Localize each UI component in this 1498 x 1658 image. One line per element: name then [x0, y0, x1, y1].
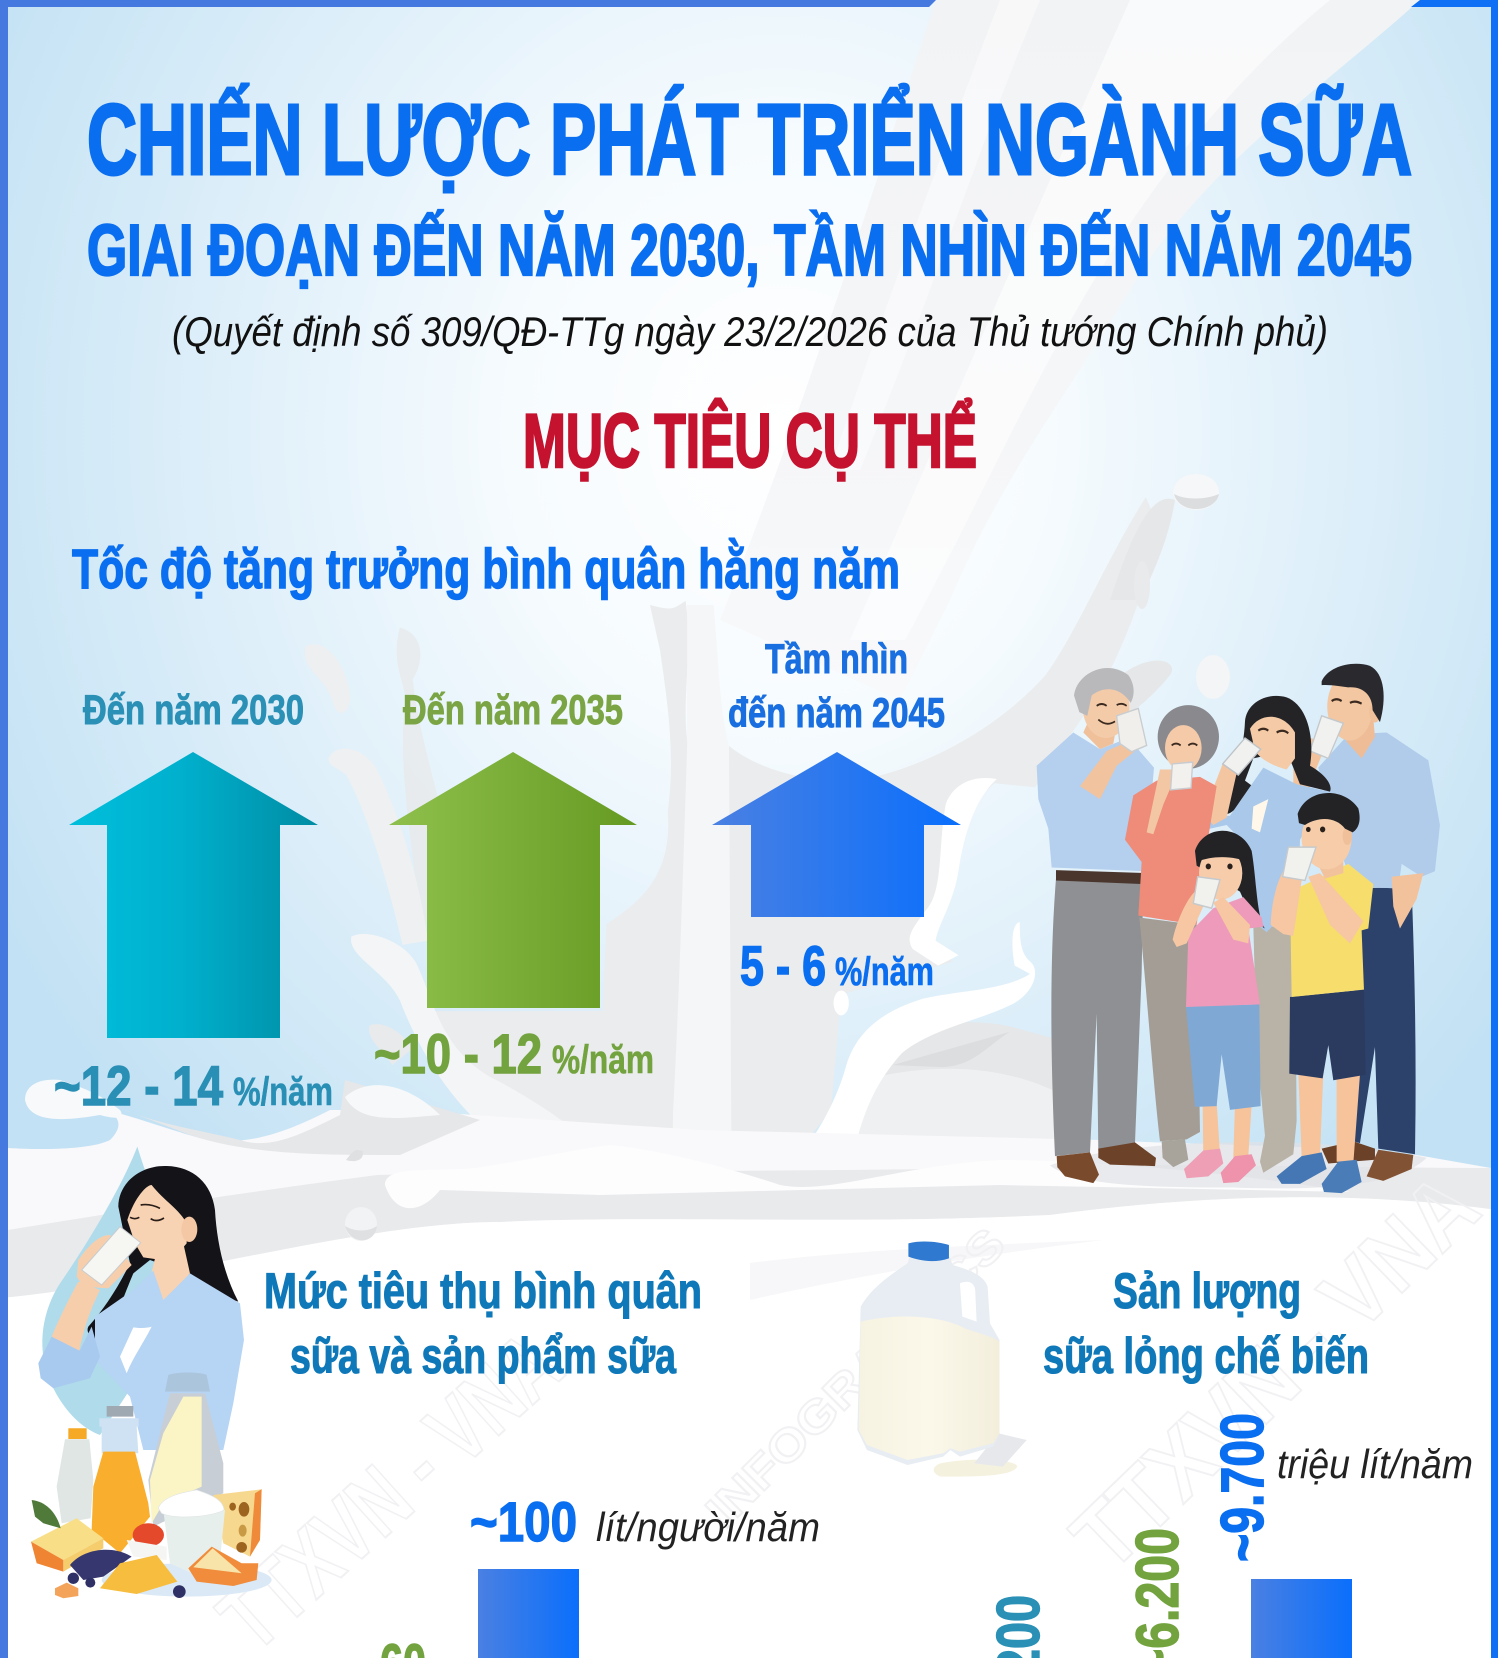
heading: liquid milk output: sữa lỏng chế biến	[1043, 1328, 1369, 1384]
heading: liquid milk output: Sản lượng	[1113, 1263, 1301, 1319]
watermarks	[200, 1155, 1498, 1658]
milk stream from top	[720, 0, 1420, 700]
title	[87, 84, 1412, 291]
subtitle: (Quyết định số 309/QĐ-TTg ngày 23/2/2026 của Thủ tướng Chính phủ)	[172, 308, 1328, 355]
growth item 2045: %/năm	[835, 950, 934, 994]
heading: consumption: Mức tiêu thụ bình quân	[264, 1263, 702, 1319]
output bar chart	[985, 1413, 1352, 1658]
grandfather	[1037, 668, 1156, 1183]
growth item 2030: Đến năm 2030	[83, 686, 304, 733]
boy	[1271, 793, 1373, 1193]
illustration: milk jug	[857, 1242, 1027, 1477]
growth item 2030: %/năm	[233, 1070, 333, 1114]
heading: growth rate: Tốc độ tăng trưởng bình quân hằng năm	[72, 537, 900, 600]
section heading: specific targets: MỤC TIÊU CỤ THỂ	[523, 398, 977, 484]
heading: consumption	[264, 1263, 702, 1384]
growth item 2045: đến năm 2045	[728, 689, 945, 736]
growth item 2045	[712, 635, 961, 997]
illustration: family drinking milk	[1037, 664, 1440, 1193]
growth item 2030	[54, 686, 333, 1117]
consumption target label: ~100	[470, 1490, 577, 1553]
father	[1293, 664, 1440, 1181]
grandmother	[1125, 705, 1219, 1167]
growth item 2035: Đến năm 2035	[403, 686, 623, 733]
growth item 2045: Tầm nhìn	[765, 635, 908, 682]
output bar chart: ~9.700	[1209, 1413, 1276, 1562]
watermarks: INFOGRAPHICS	[695, 1217, 1015, 1537]
growth item 2045: 5 - 6	[740, 934, 826, 997]
growth item 2035: %/năm	[552, 1038, 654, 1082]
output unit label: triệu lít/năm	[1277, 1441, 1473, 1487]
watermarks: TTXVN - VNA	[200, 1313, 581, 1658]
growth item 2030: ~12 - 14	[54, 1054, 223, 1117]
growth item 2035: ~10 - 12	[374, 1022, 542, 1085]
heading: liquid milk output	[1043, 1263, 1369, 1384]
consumption target label: lít/người/năm	[596, 1504, 820, 1550]
mother	[1193, 696, 1331, 1173]
girl	[1173, 831, 1265, 1183]
dairy products	[31, 1372, 272, 1598]
growth item 2035	[374, 686, 654, 1085]
milk splash crown	[305, 497, 1160, 1169]
woman	[38, 1166, 244, 1450]
consumption target label	[470, 1490, 820, 1553]
consumption bar chart	[380, 1569, 579, 1658]
milk floor and waves	[0, 1080, 1498, 1658]
heading: consumption: sữa và sản phẩm sữa	[290, 1328, 677, 1384]
milk drops	[1100, 474, 1230, 730]
illustration: woman drinking milk with dairy products	[31, 1147, 272, 1598]
